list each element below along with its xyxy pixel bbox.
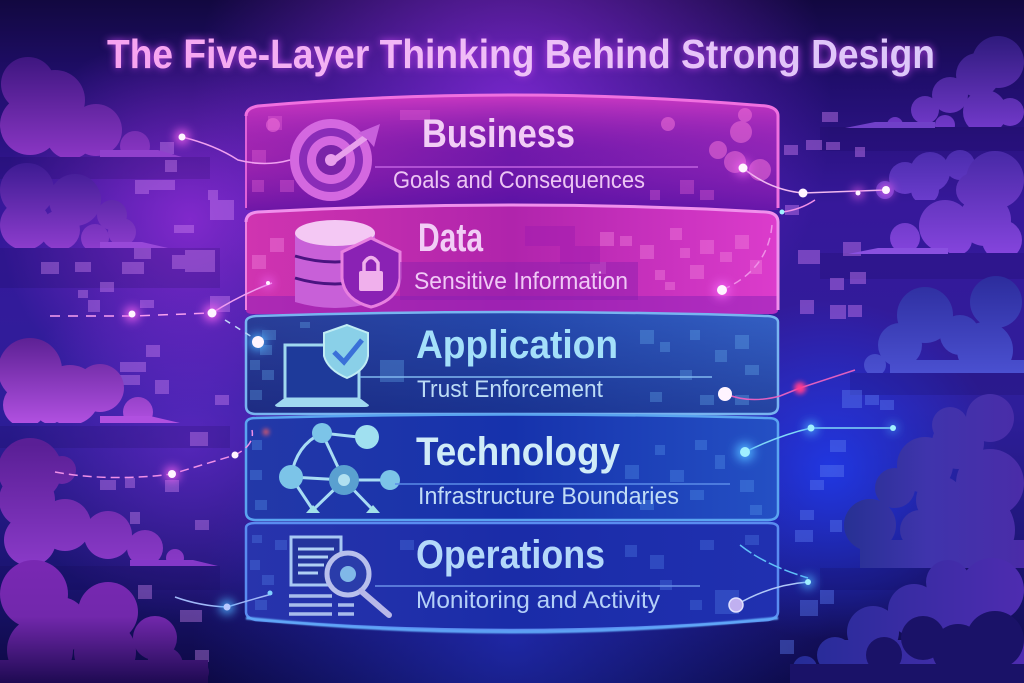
glowing connector lines and nodes [50,130,897,614]
text: Trust Enforcement: Trust Enforcement [417,376,603,403]
decorative clouds right [790,36,1024,683]
decorative clouds left [0,57,218,683]
icon: document with magnifier [289,537,389,615]
panel: Data layer [246,205,778,314]
heading: Technology: Technology [416,430,621,474]
icon: target with arrow [290,119,380,201]
panel: Application layer [246,312,778,414]
text: Infrastructure Boundaries: Infrastructure Boundaries [418,483,679,510]
panel: Business layer [246,95,778,210]
text: Monitoring and Activity: Monitoring and Activity [416,587,660,614]
icon: database with shield and padlock [295,220,400,308]
panel: Operations layer [246,523,778,632]
text: Goals and Consequences: Goals and Consequences [393,167,645,194]
heading: Business: Business [422,112,575,156]
panel: Technology layer [246,414,778,520]
heading: Data: Data [418,216,484,260]
heading: Application: Application [416,323,618,367]
title: The Five-Layer Thinking Behind Strong Design [107,31,935,77]
heading: Operations: Operations [416,533,605,577]
icon: network graph [279,423,400,513]
icon: laptop with shield check [275,325,369,407]
text: Sensitive Information: Sensitive Information [414,268,628,295]
